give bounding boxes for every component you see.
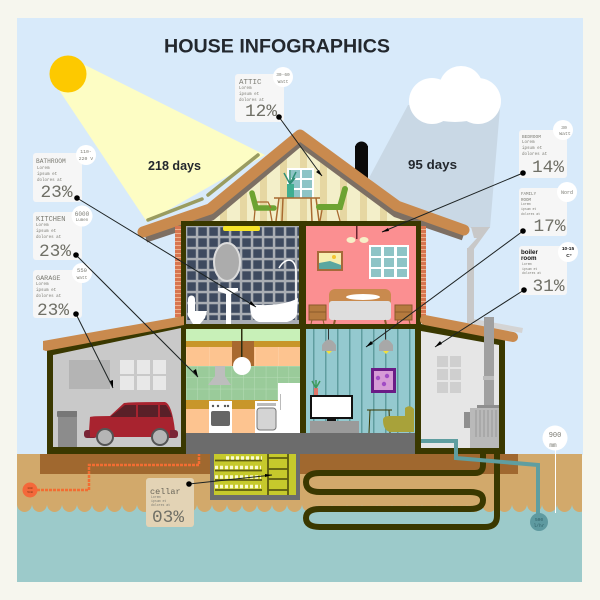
callout: bedroom: 30 (561, 125, 567, 131)
callout: bedroom: Watt (559, 131, 571, 137)
callout: attic: Watt (278, 79, 289, 85)
purple picture (371, 368, 396, 393)
label: rain days: 95 days (408, 157, 457, 172)
callout: kitchen: ipsum et (36, 229, 57, 234)
pendant lamp (233, 329, 251, 375)
sink (218, 288, 238, 324)
car (84, 402, 178, 445)
callout: bedroom: BEDROOM (522, 134, 541, 140)
plant (284, 170, 296, 198)
electric cable (37, 454, 199, 490)
main roof (143, 135, 464, 239)
leader dots (73, 114, 527, 487)
armchair (383, 406, 414, 432)
callout: garage (33, 263, 92, 321)
callout: boiler room: dolores at (522, 271, 541, 275)
bed (329, 289, 391, 324)
brick walls (175, 226, 426, 338)
callout: bathroom: Lorem (37, 167, 50, 171)
callout: kitchen: KITCHEN (36, 216, 65, 224)
table (274, 198, 320, 221)
bathtub (250, 298, 298, 322)
room: bathroom (186, 226, 299, 324)
callout: attic: 30-60 (276, 72, 290, 78)
shelves (215, 454, 288, 495)
callout: attic: ATTIC (239, 79, 262, 87)
callout: garage: Lorem (36, 283, 49, 287)
attic window (287, 168, 314, 198)
electric meter: 5kW (27, 490, 33, 494)
callout: cellar: cellar (150, 487, 181, 497)
label: sun days: 218 days (148, 158, 201, 173)
attic (180, 140, 424, 222)
callout: family room: 17% (534, 217, 566, 237)
callout: bathroom: 23% (40, 183, 73, 203)
callout: boiler room: 31% (532, 277, 565, 297)
callout: boiler room: Lorem (522, 262, 532, 266)
callout: kitchen: dolores at (36, 235, 62, 240)
callout: family room: dolores at (521, 212, 540, 216)
well gauge: 500 (535, 517, 543, 523)
garage roof (43, 316, 184, 351)
room: boiler room (421, 324, 505, 454)
window (369, 245, 409, 279)
jars (215, 458, 262, 486)
room: kitchen (186, 329, 300, 433)
wall panel (69, 360, 110, 389)
counter band (186, 400, 278, 409)
callout: kitchen (33, 206, 92, 262)
callout: kitchen: Lumen (76, 219, 89, 223)
callout: bathroom (33, 145, 96, 203)
lower wall (186, 409, 278, 433)
callout: boiler room (519, 242, 578, 297)
callout: bedroom (519, 120, 573, 178)
callout: boiler room: C° (566, 253, 572, 259)
stool (367, 410, 392, 433)
boiler roof (425, 320, 513, 337)
icon: cloud (409, 66, 501, 124)
well gauge: l/hr (534, 523, 545, 529)
callout: cellar: ipsum et (151, 499, 166, 503)
cellar (210, 454, 300, 500)
callout: cellar (146, 478, 194, 528)
arrow heads (110, 170, 442, 477)
water pipe (421, 441, 538, 515)
shower arm (279, 260, 296, 300)
gutter and downspout (467, 227, 490, 323)
electric meter: 100 (27, 487, 33, 490)
callout: kitchen: Lorem (36, 224, 49, 228)
callout: family room: FAMILY (521, 193, 537, 197)
gutter strip (474, 319, 523, 333)
house frame (181, 221, 421, 454)
top strip (186, 329, 300, 341)
trash bin (57, 411, 77, 447)
callout: boiler room: room (521, 255, 537, 262)
callout: cellar: 03% (152, 508, 184, 528)
water table (17, 505, 582, 582)
depth marker: mm (549, 442, 557, 449)
callout: garage: dolores at (36, 294, 62, 299)
title: HOUSE INFOGRAPHICS (164, 36, 390, 58)
boiler and flue (464, 317, 499, 448)
toilet (188, 296, 207, 324)
icon: chimney (355, 142, 368, 182)
upper cabinet band (186, 341, 300, 347)
tiled backsplash (186, 366, 300, 400)
callout: garage: GARAGE (36, 275, 60, 283)
callout: cellar: dolores at (151, 503, 170, 507)
pendant lamp right (379, 329, 393, 354)
washer (255, 401, 278, 433)
depth marker: 900 (549, 432, 561, 440)
callout: garage: 550 (77, 267, 87, 274)
window (437, 356, 461, 393)
callout: bathroom: ipsum et (37, 172, 58, 177)
television (310, 395, 353, 421)
callout: bedroom: 14% (532, 158, 564, 178)
callout: attic: dolores at (239, 98, 265, 103)
ground loop pipe (306, 454, 497, 527)
callout: bedroom: dolores at (522, 152, 548, 157)
rain beam (369, 105, 500, 228)
callout: bathroom: 220 V (79, 156, 93, 162)
callout: family room: ipsum et (521, 207, 536, 211)
floor strip (186, 320, 299, 324)
shelf unit (232, 341, 254, 367)
callout: family room (519, 182, 577, 237)
solar panels (148, 155, 258, 220)
plant (312, 380, 320, 397)
callout: boiler room: boiler (521, 249, 538, 256)
cooker hood (208, 366, 231, 385)
callout: bedroom: ipsum et (522, 146, 543, 151)
fridge (278, 383, 300, 433)
sky (17, 18, 583, 455)
chair right (319, 189, 345, 221)
callout: boiler room: ipsum et (522, 267, 537, 271)
foundation soil band (40, 454, 518, 474)
leader lines with arrows (76, 117, 524, 484)
depth marker (542, 426, 568, 513)
room: family room (306, 329, 415, 433)
tv stand (310, 421, 359, 433)
pendant lamp left (322, 329, 336, 354)
vertical partition cover (300, 329, 306, 433)
callout: garage: 23% (37, 301, 69, 321)
callout: garage: Watt (77, 275, 88, 281)
electric meter (22, 482, 38, 498)
callout: family room: ROOM (521, 199, 532, 203)
callout: attic: 12% (245, 102, 277, 122)
picture (317, 251, 343, 271)
callout: kitchen: 6000 (75, 211, 90, 218)
mirror (214, 243, 240, 281)
room: bedroom (306, 226, 416, 324)
soil (17, 454, 582, 514)
callout: family room: Nord (561, 190, 573, 196)
icon: sun (50, 56, 86, 92)
callout: kitchen: 23% (39, 242, 71, 262)
callout: garage: ipsum et (36, 288, 57, 293)
callout: boiler room: 10-15 (562, 246, 574, 252)
callout: bedroom: Lorem (522, 141, 535, 145)
chair left (252, 193, 274, 221)
callout: bathroom: 110- (80, 149, 92, 155)
oven (209, 401, 232, 433)
floor slab (186, 433, 415, 454)
window (120, 360, 166, 390)
well gauge (530, 513, 548, 531)
callout: attic (235, 67, 293, 122)
callout: bathroom: BATHROOM (36, 158, 66, 165)
nightstands (309, 305, 412, 324)
callout: bathroom: dolores at (37, 178, 63, 183)
callout: attic: Lorem (239, 87, 252, 91)
room: garage (47, 320, 186, 454)
callout: cellar: Lorem (151, 495, 161, 499)
sunlight beam (59, 65, 265, 222)
callout: attic: ipsum et (239, 92, 260, 97)
callout: family room: Lorem (521, 202, 531, 206)
ceiling light (223, 226, 260, 231)
chandelier (346, 226, 368, 243)
